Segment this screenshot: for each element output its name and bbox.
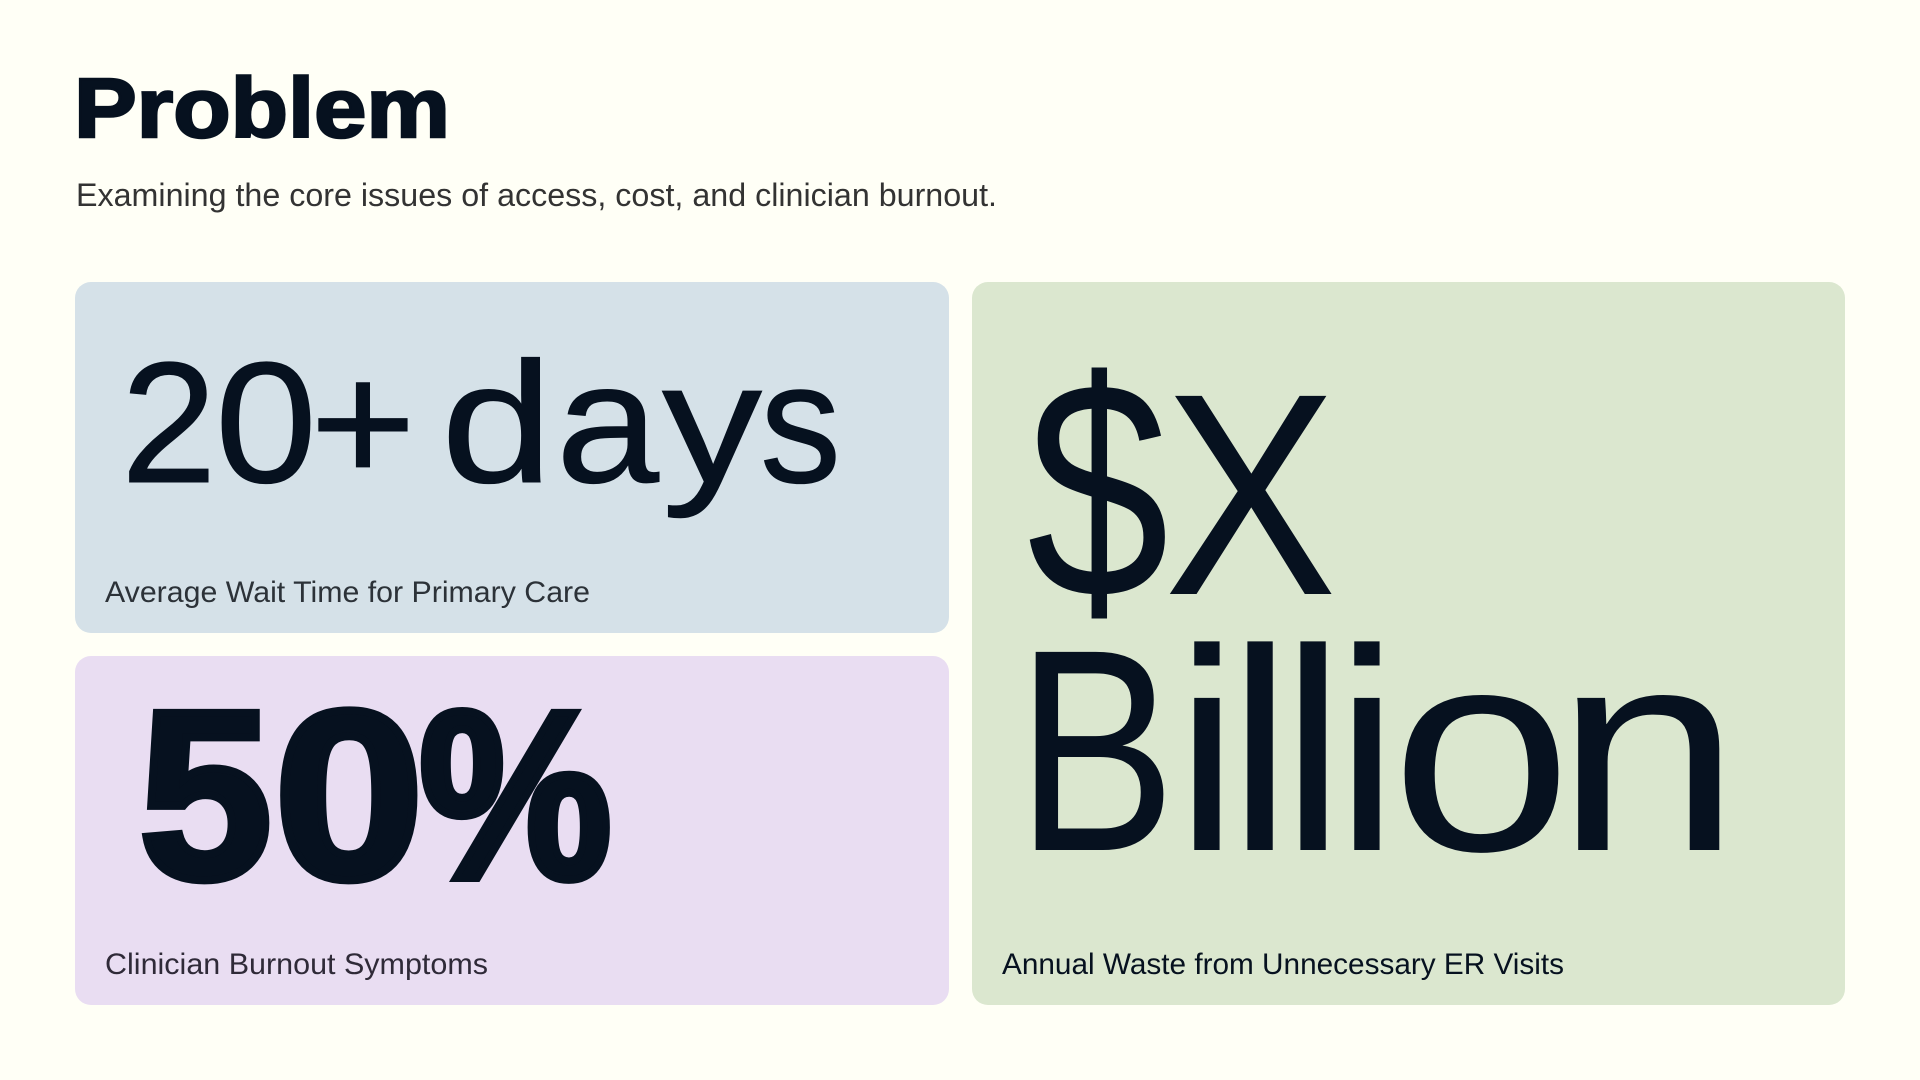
panel: clinician burnout <box>75 656 949 1005</box>
caption: burnout: Clinician Burnout Symptoms <box>105 948 488 981</box>
stat: $X Billion: o <box>1391 590 1572 912</box>
stat: $X Billion <box>1016 316 1741 912</box>
caption: wait time: Average Wait Time for Primary Care <box>105 576 590 609</box>
stat: $X Billion: n <box>1555 590 1741 912</box>
stat: 20+ days: 2 <box>121 327 217 519</box>
stat: $X Billion: $ <box>1027 316 1169 663</box>
stat: 20+ days: y <box>662 327 762 519</box>
stat: $X Billion: B <box>1016 590 1176 912</box>
stat: $X Billion: illi <box>1175 590 1399 912</box>
stat: 20+ days <box>121 327 841 519</box>
stat: 20+ days: + <box>310 327 416 519</box>
panel: annual waste <box>972 282 1845 1005</box>
panel: average wait time <box>75 282 949 633</box>
stat: 50% <box>139 661 612 929</box>
stat: 20+ days: 0 <box>215 327 317 519</box>
stat: 20+ days: s <box>760 327 841 519</box>
stat: 20+ days: a <box>556 327 659 519</box>
stat: 50%: % <box>419 661 612 929</box>
stat: 50%: 5 <box>139 661 272 929</box>
subtitle: Examining the core issues of access, cost, and clinician burnout. <box>76 177 997 213</box>
stat: 20+ days: d <box>441 327 553 519</box>
caption: annual waste: Annual Waste from Unnecessary ER Visits <box>1002 948 1564 981</box>
title: Problem <box>74 61 450 155</box>
stat: 50%: 0 <box>274 661 424 929</box>
stat: $X Billion: X <box>1164 334 1337 656</box>
